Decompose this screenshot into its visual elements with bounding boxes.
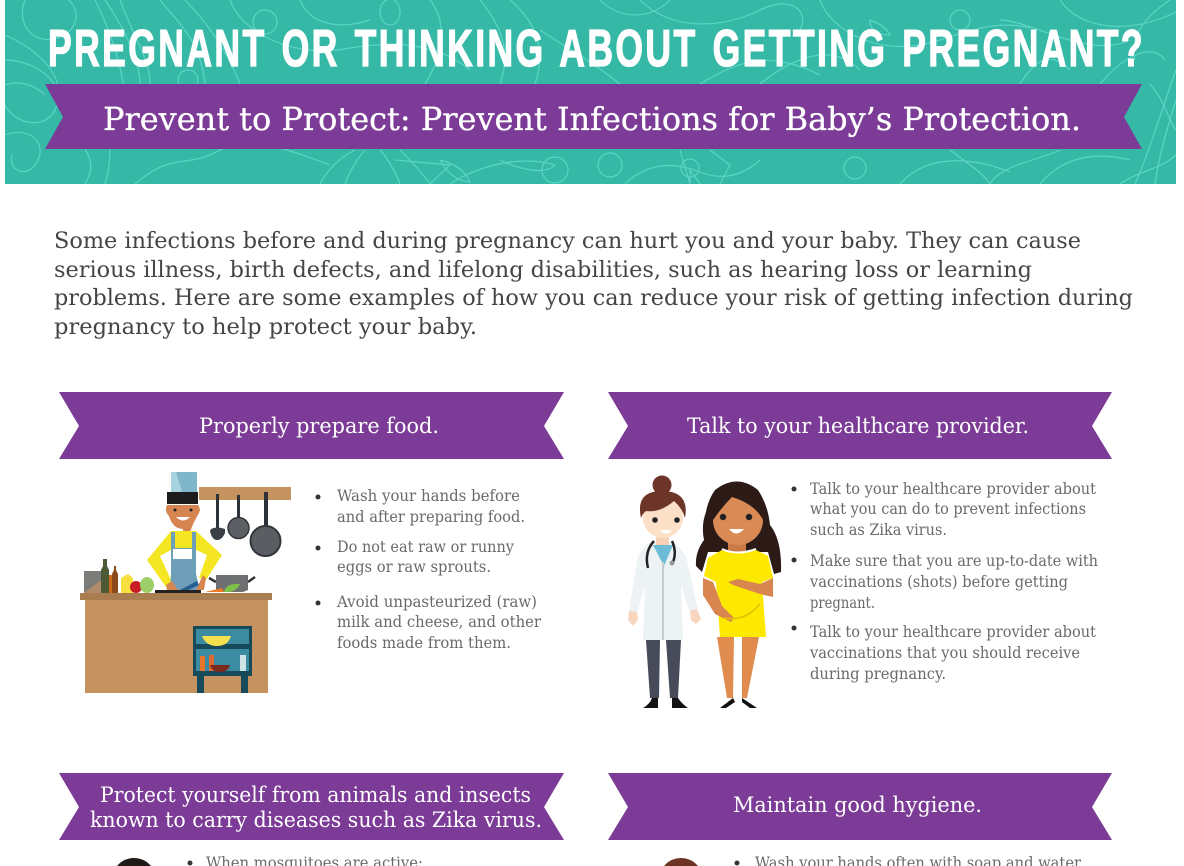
ribbon: maintain good hygiene: Maintain good hygiene.: [733, 793, 982, 817]
illustration: head of person, insects panel: [112, 858, 156, 866]
illustration: head of person, hygiene panel: [659, 858, 703, 866]
subtitle ribbon: Prevent to Protect: Prevent Infections for Baby’s Protection.: [103, 100, 1081, 138]
bullet list: healthcare: vaccinations that you should receive: [809, 643, 1080, 662]
intro paragraph: Some infections before and during pregnancy can hurt you and your baby. They can cause: [54, 229, 1081, 254]
bullet list: healthcare: pregnant.: [810, 593, 875, 612]
subtitle ribbon: [45, 84, 1142, 149]
illustration: doctor: [628, 476, 701, 708]
ribbon: protect yourself: [59, 773, 564, 840]
ribbon: maintain good hygiene: [608, 773, 1112, 840]
ribbon: properly prepare food: Properly prepare food.: [199, 414, 439, 438]
ribbon: protect yourself: known to carry diseases such as Zika virus.: [90, 808, 542, 832]
bullet list: healthcare: Talk to your healthcare provider about: [810, 622, 1097, 641]
bullet list: food: foods made from them.: [337, 633, 511, 652]
bullet list: healthcare: Talk to your healthcare provider about: [810, 479, 1097, 498]
ribbon: talk to your healthcare provider: Talk to your healthcare provider.: [687, 414, 1029, 438]
bullet list: food: milk and cheese, and other: [337, 612, 541, 631]
intro paragraph: pregnancy to help protect your baby.: [54, 315, 477, 340]
bullet list: healthcare: during pregnancy.: [810, 664, 946, 683]
ribbon: talk to your healthcare provider: [608, 392, 1112, 459]
illustration: cook at kitchen counter: [80, 472, 291, 693]
bullet list: food: Avoid unpasteurized (raw): [336, 592, 537, 611]
bullet list: food: eggs or raw sprouts.: [337, 557, 491, 576]
intro paragraph: serious illness, birth defects, and lifelong disabilities, such as hearing loss or learning: [54, 258, 1032, 283]
ribbon: properly prepare food: [59, 392, 564, 459]
bullet list: healthcare: such as Zika virus.: [810, 520, 947, 539]
bullet list: healthcare: vaccinations (shots) before getting: [809, 572, 1068, 591]
intro paragraph: [54, 229, 1133, 340]
bullet list: food: [316, 486, 541, 652]
header panel: [5, 0, 1176, 184]
bullet list: healthcare: what you can do to prevent infections: [810, 499, 1086, 518]
bullet list: food: and after preparing food.: [337, 507, 525, 526]
intro paragraph: problems. Here are some examples of how you can reduce your risk of getting infection during: [54, 286, 1133, 311]
bullet list: healthcare: [792, 479, 1098, 683]
bullet list: food: Do not eat raw or runny: [337, 537, 514, 556]
bullet list: food: Wash your hands before: [337, 486, 520, 505]
bullet list: healthcare: Make sure that you are up-to-date with: [810, 551, 1098, 570]
illustration: pregnant woman: [696, 482, 781, 708]
ribbon: protect yourself: Protect yourself from animals and insects: [100, 783, 531, 807]
